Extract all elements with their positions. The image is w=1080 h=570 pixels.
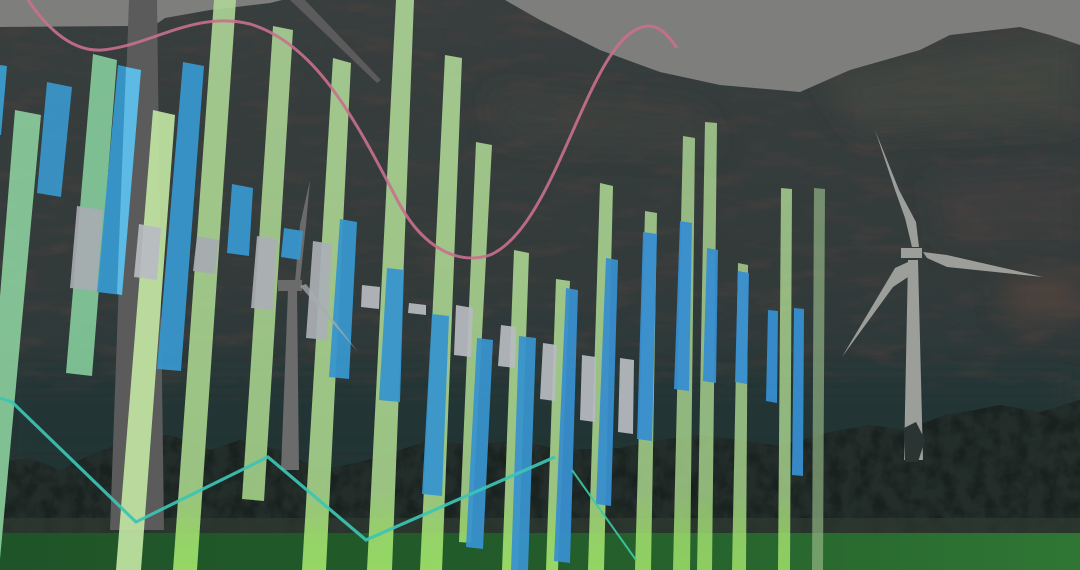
- teal line chart end segment: [572, 470, 636, 560]
- blue bar 9: [422, 314, 449, 496]
- blue bar 10: [466, 338, 493, 549]
- white bar 12: [618, 358, 634, 434]
- blue bar 16: [703, 248, 718, 383]
- bar 17: [778, 188, 792, 570]
- blue bar 17: [735, 271, 749, 384]
- blue bar 15: [674, 221, 692, 391]
- small turbine blade over bars: [300, 284, 358, 352]
- blue bar 13: [596, 258, 618, 506]
- blue bar 18: [766, 310, 778, 403]
- bar 8: [420, 55, 462, 570]
- blue bar 11: [511, 336, 536, 570]
- bar 3: [116, 110, 175, 570]
- green bars: [0, 0, 825, 570]
- blue bar 14: [637, 232, 657, 441]
- white bar 10: [540, 343, 557, 401]
- bar 18: [812, 188, 825, 570]
- bar 4: [173, 0, 236, 570]
- tree line: [0, 400, 1080, 536]
- blue bar 3: [97, 65, 141, 295]
- pink curve line: [28, 0, 677, 258]
- white bar 11: [580, 355, 596, 422]
- white bar 5: [306, 241, 332, 340]
- blue bar 2: [37, 82, 72, 197]
- blue bar 19: [792, 308, 804, 476]
- blue bar 3 light edge: [117, 67, 141, 295]
- bar 12: [588, 183, 613, 570]
- blue bar 8: [379, 268, 404, 402]
- white bar 4: [251, 236, 277, 310]
- wind turbine: large right: [842, 130, 1043, 462]
- bar 2: [66, 54, 117, 376]
- blue bar 4: [157, 62, 204, 371]
- white bar 7: [408, 303, 426, 315]
- bar 5: [242, 26, 293, 501]
- wind turbine: large left: [110, 0, 381, 530]
- wind turbine: small centre: [278, 180, 310, 470]
- bar 14: [673, 136, 695, 570]
- blue bar 1: [0, 65, 7, 135]
- blue bar 12: [554, 288, 578, 563]
- white bar 1: [70, 206, 103, 291]
- white bar 6: [361, 285, 380, 309]
- blue bars: [0, 62, 804, 570]
- white bar 3: [193, 236, 219, 274]
- teal line chart: [0, 398, 555, 540]
- bar 15: [697, 122, 717, 570]
- grass field: [0, 533, 1080, 570]
- white bar 2: [134, 224, 161, 280]
- bar 10: [502, 250, 529, 570]
- white bar 9: [498, 325, 516, 368]
- blue bar 5: [227, 184, 253, 256]
- white bars: [70, 206, 634, 434]
- bar 11: [546, 279, 570, 570]
- bar 1: [0, 110, 41, 570]
- bar 16: [732, 263, 748, 570]
- bar 13: [635, 211, 657, 570]
- blue bar 6: [281, 228, 303, 260]
- bar 9: [459, 142, 492, 543]
- white bar 8: [454, 305, 473, 357]
- bar 7: [367, 0, 414, 570]
- blue bar 7: [329, 219, 357, 379]
- bar 6: [302, 58, 351, 570]
